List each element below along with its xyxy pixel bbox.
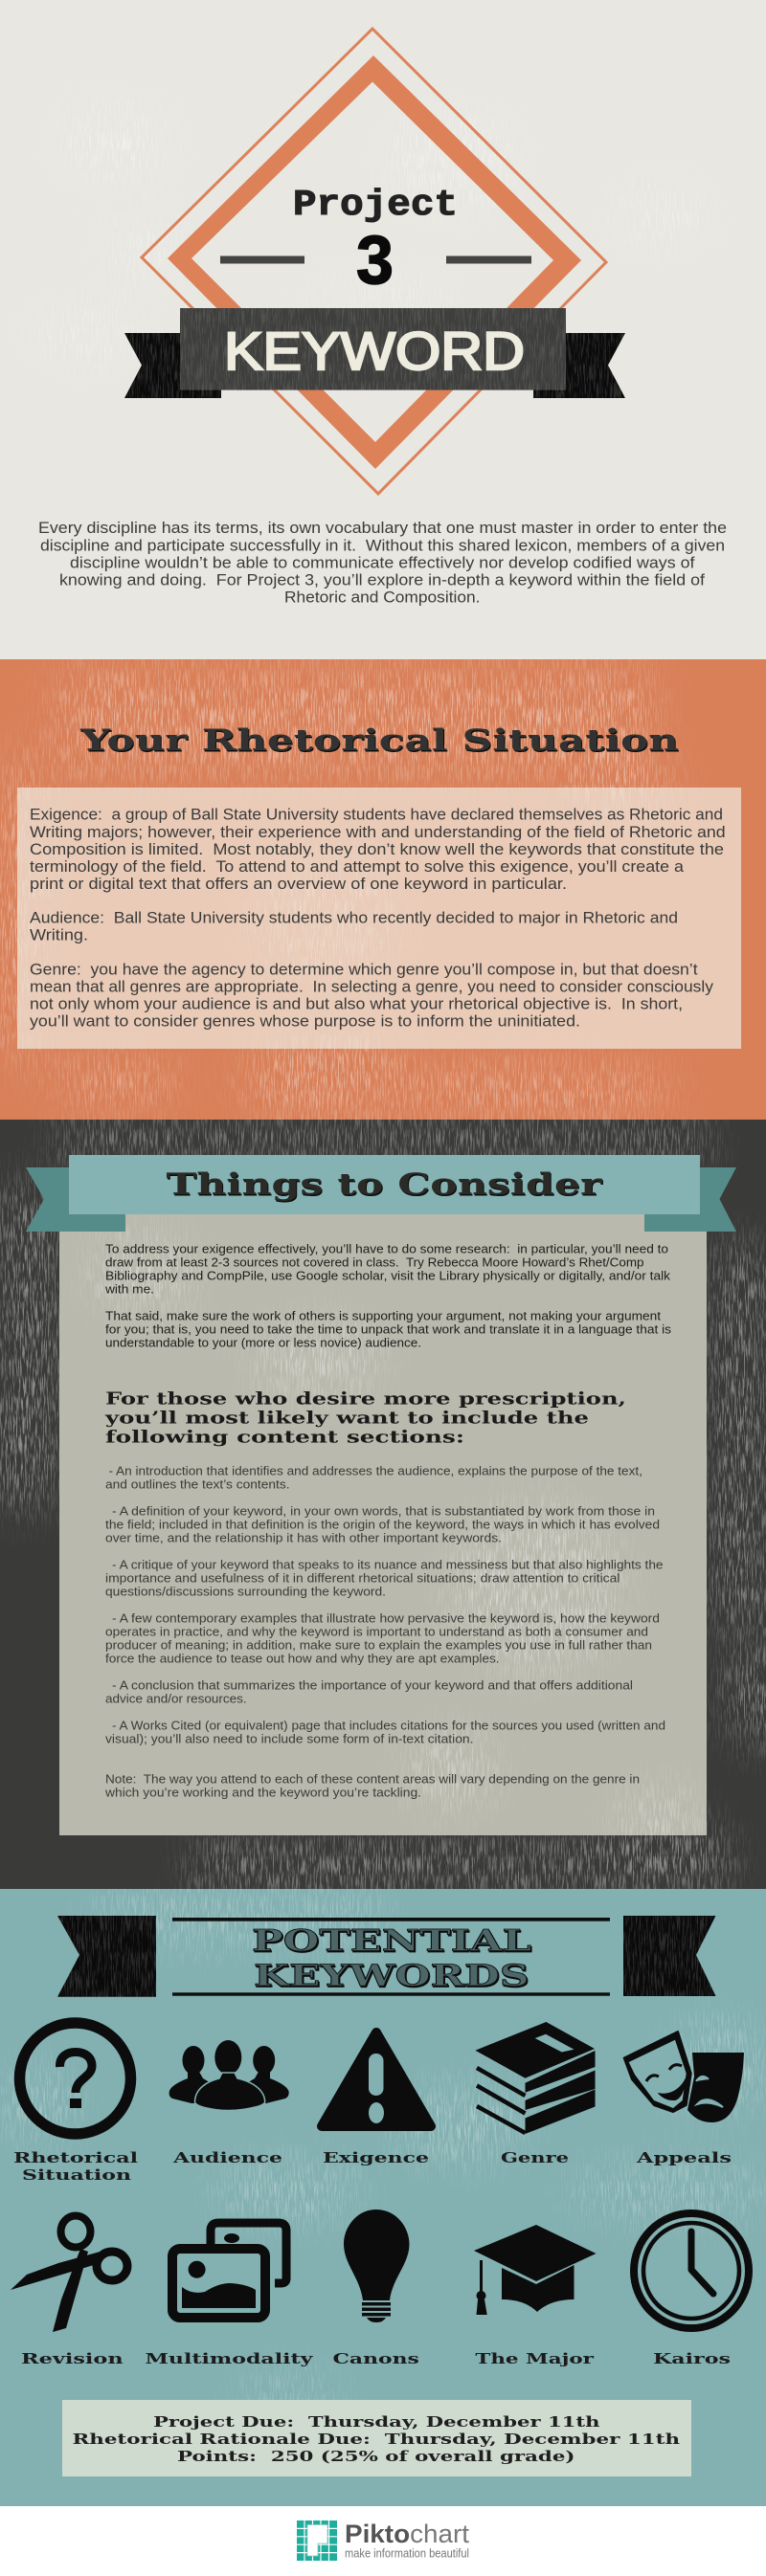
subheading: for those who desire more prescription: For those who desire more prescription, [105,1389,626,1410]
keyword: appeals: Appeals [636,2149,732,2166]
ribbon: things to consider: Things to Consider [167,1167,602,1202]
icon: stack of books [475,2022,596,2134]
heading: Project: Project [293,185,458,226]
keyword: appeals [624,2032,744,2166]
keyword: the major: The Major [475,2350,595,2367]
panel: things to consider [0,1120,766,1889]
subheading: for those who desire more prescription: you’ll most likely want to include the [104,1409,589,1429]
text box: you’ll want to consider genres whose purpose is to inform the uninitiated. [30,1013,580,1031]
keyword: genre [475,2022,596,2166]
text box: terminology of the field. To attend to and attempt to solve this exigence, you’ll create a [30,858,684,876]
text box: Audience: Ball State University students who recently decided to major in Rhetoric and [30,910,678,927]
icon: clock [634,2213,749,2328]
keyword: exigence: Exigence [323,2149,429,2166]
text box: mean that all genres are appropriate. In selecting a genre, you need to consider consciously [30,979,714,996]
text box: Writing majors; however, their experience with and understanding of the field of Rhetoric and [30,824,726,841]
logo: piktochart: make information beautiful [345,2547,469,2561]
list of content sections: force the audience to tease out how and why they are apt examples. [105,1651,500,1665]
intro paragraph [38,520,727,607]
note [104,1771,640,1799]
text box: print or digital text that offers an overview of one keyword in particular. [30,876,567,893]
keyword: kairos: Kairos [653,2350,731,2367]
divider bar right [446,256,531,264]
list of content sections: - A conclusion that summarizes the importance of your keyword and that offers additional [112,1677,633,1692]
heading: number 3: 3 [356,223,394,299]
keyword: revision [11,2216,127,2367]
keyword: kairos [634,2213,749,2367]
keyword: canons: Canons [333,2350,419,2367]
keyword: the major [474,2225,596,2367]
list of content sections: - An introduction that identifies and addresses the audience, explains the purpose of the text, [109,1463,642,1477]
content panel: Bibliography and CompPile, use Google scholar, visit the Library physically or digitally, and/or talk [105,1268,670,1282]
note: Note: The way you attend to each of these content areas will vary depending on the genre in [105,1771,640,1786]
keyword: rhetorical situation: Situation [22,2166,131,2184]
icon: piktochart tiles [297,2520,337,2561]
intro paragraph: discipline wouldn’t be able to communicate effectively nor develop codified ways of [70,555,695,572]
content panel: understandable to your (more or less novice) audience. [105,1335,421,1349]
list of content sections: visual); you’ll also need to include some form of in-text citation. [105,1731,473,1745]
callout: due dates and points: Points: 250 (25% of overall grade) [177,2449,574,2465]
content panel: with me. [104,1281,154,1296]
text box: not only whom your audience is and but also what your rhetorical objective is. In short, [30,996,683,1013]
list of content sections: - A critique of your keyword that speaks to its nuance and messiness but that also highlights the [112,1557,663,1571]
subheading: for those who desire more prescription [104,1389,626,1448]
badge: project 3 keyword diamond [124,29,625,494]
callout: due dates and points [62,2400,691,2476]
icon: light bulb [344,2210,410,2322]
list of content sections: - A definition of your keyword, in your own words, that is substantiated by work from those in [112,1503,655,1518]
text box: Genre: you have the agency to determine which genre you’ll compose in, but that doesn’t [30,962,698,979]
banner: potential keywords: POTENTIAL [252,1924,531,1959]
panel: your rhetorical situation [0,659,766,1120]
list of content sections: - A few contemporary examples that illustrate how pervasive the keyword is, how the keyword [112,1610,660,1625]
icon: stacked pictures [172,2223,286,2318]
icon: group of people [169,2040,289,2111]
panel: header background [0,0,766,659]
intro paragraph: knowing and doing. For Project 3, you’ll explore in-depth a keyword within the field of [59,571,706,588]
list of content sections: the field; included in that definition is the origin of the keyword, the ways in which it has evolved [105,1517,660,1531]
list of content sections [105,1463,665,1745]
content panel: To address your exigence effectively, you’ll have to do some research: in particular, you’ll need to [105,1241,668,1255]
keyword: genre: Genre [501,2149,569,2166]
text box: Writing. [30,927,88,944]
thick diamond [168,56,581,469]
divider bar left [220,256,304,264]
intro paragraph: Rhetoric and Composition. [284,589,481,607]
text box: Composition is limited. Most notably, they don’t know well the keywords that constitute the [30,841,724,858]
intro paragraph: Every discipline has its terms, its own vocabulary that one must master in order to enter the [38,520,727,537]
note: which you’re working and the keyword you’re tackling. [104,1785,421,1799]
list of content sections: over time, and the relationship it has with other important keywords. [105,1530,502,1544]
banner: potential keywords [57,1916,716,1997]
callout: due dates and points: Rhetorical Rationale Due: Thursday, December 11th [73,2432,681,2448]
keyword: revision: Revision [21,2350,124,2367]
keyword: canons [333,2210,419,2367]
banner: potential keywords: KEYWORDS [254,1959,529,1993]
text box [17,788,741,1049]
content panel [59,1214,707,1835]
list of content sections: advice and/or resources. [105,1691,247,1705]
icon: graduation cap [474,2225,596,2315]
content panel: for you; that is, you need to take the time to unpack that work and translate it in a language that is [105,1321,671,1336]
ribbon: keyword [124,308,625,398]
content panel: That said, make sure the work of others is supporting your argument, not making your argument [105,1308,661,1322]
list of content sections: producer of meaning; in addition, make sure to explain the examples you use in full rather than [105,1637,652,1652]
intro paragraph: discipline and participate successfully in it. Without this shared lexicon, members of a given [40,538,725,555]
keyword: rhetorical situation: Rhetorical [13,2149,138,2166]
subheading: for those who desire more prescription: following content sections: [105,1428,464,1448]
keyword: audience: Audience [172,2149,282,2166]
logo: piktochart: Piktochart [345,2520,470,2548]
list of content sections: questions/discussions surrounding the keyword. [105,1584,386,1598]
icon: theatre masks [624,2032,744,2122]
icon: scissors [11,2216,127,2332]
keyword: audience [169,2040,289,2166]
logo: piktochart [297,2520,470,2561]
outer thin diamond [142,29,606,494]
ribbon: things to consider [26,1155,736,1232]
list of content sections: operates in practice, and why the keyword is important to understand as both a consumer and [105,1624,648,1638]
panel: potential keywords [0,1889,766,2506]
icon: warning triangle [322,2032,431,2126]
text box: Exigence: a group of Ball State University students have declared themselves as Rhetoric and [30,807,723,824]
keyword: rhetorical situation [13,2023,138,2184]
list of content sections: and outlines the text’s contents. [105,1477,290,1491]
keyword: multimodality: Multimodality [146,2350,314,2367]
panel: footer [0,2506,766,2576]
list of content sections: importance and usefulness of it in different rhetorical situations; draw attention to critical [105,1570,620,1585]
content panel: draw from at least 2-3 sources not covered in class. Try Rebecca Moore Howard’s Rhet/Comp [105,1255,643,1269]
keyword: multimodality [146,2223,314,2367]
keyword: exigence [322,2032,431,2166]
callout: due dates and points: Project Due: Thursday, December 11th [153,2414,600,2431]
heading: your rhetorical situation: Your Rhetorical Situation [79,723,679,758]
ribbon: keyword: KEYWORD [224,321,525,381]
list of content sections: - A Works Cited (or equivalent) page that includes citations for the sources you used (written and [112,1718,665,1732]
icon: question mark [19,2023,130,2134]
